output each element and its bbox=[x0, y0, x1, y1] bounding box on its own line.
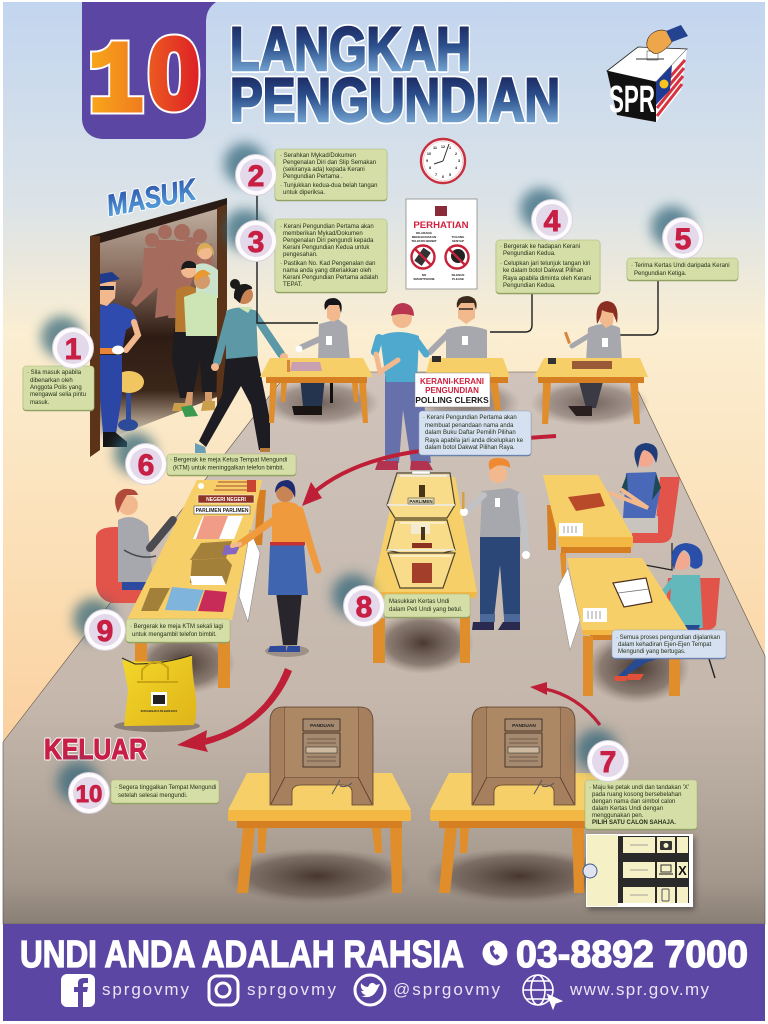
step badge 10 bbox=[57, 761, 110, 814]
poster: perhatian: PERHATIAN bbox=[413, 220, 469, 231]
callout: polling clerk note bbox=[419, 411, 531, 455]
callout: step 2: · Serahkan Mykad/Dokumen bbox=[280, 153, 356, 159]
callout: step 1 bbox=[23, 366, 94, 410]
title: Langkah Pengundian: LANGKAH bbox=[230, 15, 471, 83]
polling booth left: PANDUAN bbox=[310, 723, 334, 729]
queue of voters bbox=[172, 243, 218, 417]
callout: polling clerk note: Raya apabila jari anda dicelupkan ke bbox=[425, 438, 524, 444]
callout: step 6 bbox=[167, 454, 296, 475]
step badge 9 bbox=[73, 598, 126, 650]
callout: step 1: masuk. bbox=[30, 400, 50, 406]
callout: step 6: (KTM) untuk meninggalkan telefon bimbit. bbox=[173, 466, 284, 472]
wall clock: 12 bbox=[441, 145, 445, 149]
KTM table with papers: PARLIMEN PARLIMEN bbox=[196, 508, 249, 514]
callout: step 5: Pengundian Ketiga. bbox=[634, 271, 687, 277]
step badge 4 bbox=[520, 188, 572, 240]
phone number: 03-8892 7000 bbox=[516, 934, 748, 976]
step badge 3: 3 bbox=[248, 226, 264, 259]
website address: www.spr.gov.my bbox=[569, 980, 710, 999]
wall clock: 10 bbox=[427, 152, 431, 156]
callout: step 9: · Bergerak ke meja KTM sekali lagi bbox=[130, 624, 223, 630]
red arrow to step 6 bbox=[302, 436, 556, 506]
callout: step 2: untuk diperiksa. bbox=[283, 190, 325, 196]
step badge 1 bbox=[41, 316, 94, 368]
callout: polling clerk note: dalam botol Dakwat Pilihan Raya. bbox=[425, 445, 515, 451]
step badge 1: 1 bbox=[65, 333, 81, 366]
callout: step 10: setelah selesai mengundi. bbox=[118, 793, 188, 799]
voter with orange hair bbox=[460, 458, 530, 630]
callout: step 7: · Maju ke petak undi dan tandakan 'X' bbox=[589, 785, 689, 791]
step badge 8 bbox=[332, 574, 384, 626]
poster: perhatian: SILENCE bbox=[451, 273, 465, 277]
title panel with number 10: 1 bbox=[88, 28, 144, 141]
wall clock: 7 bbox=[435, 173, 437, 177]
sign: polling clerks: POLLING CLERKS bbox=[415, 395, 489, 405]
callout: step 5 bbox=[627, 258, 738, 280]
callout: step 4: Raya apabila diminta oleh Kerani bbox=[503, 276, 591, 282]
title panel with number 10 bbox=[82, 2, 216, 141]
clerk table 2 with clerk bbox=[425, 296, 510, 411]
centre table with ballot boxes: PARLIMEN bbox=[409, 499, 433, 504]
step badge 5 bbox=[651, 206, 704, 258]
callout: step 4: Pengundian Kedua. bbox=[503, 283, 556, 289]
silhouettes in doorway bbox=[131, 224, 212, 318]
callout: step 7: dalam Kertas Undi dengan bbox=[592, 806, 663, 812]
sign: polling clerks bbox=[415, 373, 490, 407]
step badge 5: 5 bbox=[675, 223, 691, 256]
title panel with number 10: 0 bbox=[148, 18, 200, 130]
sign: polling clerks: KERANI-KERANI bbox=[420, 377, 484, 386]
label: keluar: KELUAR bbox=[44, 734, 147, 766]
icon: website globe bbox=[523, 975, 561, 1008]
callout: polling clerk note: dalam Buku Daftar Pemilih Pilihan bbox=[425, 430, 516, 436]
callout: step 3: memberikan Mykad/Dokumen bbox=[283, 231, 363, 237]
wall clock: 5 bbox=[449, 173, 451, 177]
step badge 6: 6 bbox=[138, 449, 154, 482]
title: Langkah Pengundian: PENGUNDIAN bbox=[230, 66, 560, 134]
label: masuk: MASUK bbox=[104, 173, 201, 223]
right upper table with seated woman bbox=[543, 443, 680, 580]
woman in teal walking bbox=[195, 279, 288, 453]
callout: step 3: TEPAT. bbox=[283, 282, 303, 288]
sample ballot paper: X bbox=[678, 863, 687, 878]
callout: step 3: Kerani Pengundian Kedua untuk bbox=[283, 245, 370, 251]
step badge 7 bbox=[576, 729, 628, 782]
step badge 8: 8 bbox=[356, 591, 372, 624]
callout: step 6: · Bergerak ke meja Ketua Tempat Mengundi bbox=[170, 458, 287, 464]
icon: instagram bbox=[209, 976, 238, 1005]
polling booth right bbox=[430, 707, 613, 893]
door: masuk bbox=[90, 198, 227, 442]
title: Langkah Pengundian: LANGKAH bbox=[230, 15, 471, 83]
callout: step 4: · Bergerak ke hadapan Kerani bbox=[500, 244, 580, 250]
yellow bag: SURUHANJAYA PILIHAN RAYA bbox=[141, 710, 178, 713]
callout: step 1: · Sila masuk apabila bbox=[27, 370, 82, 376]
callout: step 3: · Kerani Pengundian Pertama akan bbox=[280, 224, 374, 230]
callout: step 5: · Terima Kertas Undi daripada Kerani bbox=[631, 263, 730, 269]
SPR ballot box logo bbox=[607, 25, 688, 122]
callout: step 4: · Celupkan jari telunjuk tangan kiri bbox=[500, 261, 590, 267]
polling booth left bbox=[228, 707, 411, 893]
step badge 4: 4 bbox=[544, 205, 561, 238]
callout: step 3: Kerani Pengundian Pertama adalah bbox=[283, 275, 378, 281]
woman at KTM table bbox=[232, 480, 318, 657]
step badge 7: 7 bbox=[600, 746, 616, 779]
step badge 10: 10 bbox=[76, 781, 102, 808]
poster: perhatian: TOLONG bbox=[452, 235, 465, 239]
callout: polling clerk note: membuat penandaan nama anda bbox=[425, 423, 514, 429]
callout: step 3: · Pastikan No. Kad Pengenalan dan bbox=[280, 261, 375, 267]
step badge 6 bbox=[114, 432, 166, 484]
title panel with number 10: 1 bbox=[88, 28, 144, 141]
poster: perhatian: SENYAP bbox=[452, 239, 464, 243]
wall clock: 9 bbox=[426, 159, 428, 163]
callout: step 8 bbox=[384, 594, 470, 617]
callout: step 1: dibenarkan oleh bbox=[30, 378, 73, 384]
KTM table with papers: NEGERI NEGERI bbox=[206, 497, 246, 503]
callout: step 8: dalam Peti Undi yang betul. bbox=[389, 607, 463, 613]
stool bbox=[114, 371, 144, 431]
transparent ballot boxes bbox=[387, 473, 455, 588]
connector lines bbox=[257, 195, 658, 335]
red arrow to keluar bbox=[177, 668, 292, 752]
callout: step 4: ke dalam botol Dakwat Pilihan bbox=[503, 268, 583, 274]
left door jamb bbox=[90, 236, 100, 457]
centre table with ballot boxes bbox=[372, 471, 477, 663]
poster: perhatian: MENGGUNAKAN bbox=[412, 235, 436, 239]
clerk table 3 with clerk bbox=[534, 301, 648, 424]
poster: perhatian: NO bbox=[422, 273, 427, 277]
poster: perhatian: DILARANG bbox=[416, 231, 433, 235]
step badge 9: 9 bbox=[97, 615, 113, 648]
callout: step 7 bbox=[585, 780, 697, 829]
wall clock: 2 bbox=[455, 152, 457, 156]
label: masuk: MASUK bbox=[104, 173, 201, 223]
callout: step 2: Pengenalan Diri dan Slip Semakan bbox=[283, 160, 376, 166]
sample ballot paper bbox=[583, 834, 695, 910]
twitter handle: @sprgovmy bbox=[393, 980, 500, 999]
sign: polling clerks: PENGUNDIAN bbox=[425, 386, 479, 395]
callout: step 4 bbox=[496, 240, 600, 293]
callout: step 2: (sekiranya ada) kepada Kerani bbox=[283, 167, 365, 173]
callout: step 7: pada ruang kosong bersebelahan bbox=[592, 792, 681, 798]
angled sign on KTM table bbox=[239, 530, 260, 622]
right lower table with seated woman bbox=[558, 543, 720, 696]
facebook handle: sprgovmy bbox=[102, 980, 190, 999]
wall clock: 6 bbox=[442, 175, 444, 179]
wall clock: 4 bbox=[455, 166, 458, 170]
callout: step 10 bbox=[111, 780, 219, 803]
wall clock: 8 bbox=[429, 166, 431, 170]
callout: step 2: Pengundian Pertama . bbox=[283, 174, 343, 180]
floor bbox=[3, 372, 765, 924]
callout: proses pengundian: · Semua proses pengundian dijalankan bbox=[616, 635, 720, 641]
poster: perhatian: SMARTPHONE bbox=[413, 277, 435, 281]
poster: perhatian: PLEASE bbox=[452, 277, 464, 281]
callout: step 10: · Segera tinggalkan Tempat Mengundi bbox=[115, 785, 216, 791]
title: Langkah Pengundian bbox=[230, 15, 560, 134]
callout: step 1: mengawal selia pintu bbox=[30, 392, 86, 398]
callout: step 7: menggunakan pen. bbox=[592, 813, 644, 819]
callout: step 3: nama anda yang diteriakkan oleh bbox=[283, 268, 371, 274]
icon: phone bbox=[482, 940, 508, 966]
step badge 3 bbox=[224, 209, 276, 262]
step badge 2: 2 bbox=[248, 160, 264, 193]
callout: step 1: Anggota Polis yang bbox=[30, 385, 82, 391]
poster: perhatian bbox=[406, 199, 477, 289]
footer slogan: UNDI ANDA ADALAH RAHSIA bbox=[20, 934, 464, 976]
SPR ballot box logo: SPR bbox=[609, 79, 655, 121]
callout: step 3: Pengenalan Diri pengundi kepada bbox=[283, 238, 374, 244]
callout: step 3: pengesahan. bbox=[283, 252, 318, 258]
callout: step 4: Pengundian Kedua. bbox=[503, 251, 556, 257]
icon: twitter bbox=[355, 975, 385, 1005]
wall clock: 3 bbox=[458, 159, 460, 163]
callout: step 9 bbox=[126, 619, 230, 642]
callout: proses pengundian: Mengundi yang bertugas. bbox=[618, 649, 686, 655]
step badge 2 bbox=[224, 143, 276, 196]
yellow bag bbox=[114, 655, 200, 732]
callout: proses pengundian: dalam kehadiran Ejen-Ejen Tempat bbox=[618, 642, 712, 648]
polling booth right: PANDUAN bbox=[512, 723, 536, 729]
callout: step 8: Masukkan Kertas Undi bbox=[389, 599, 449, 605]
callout: step 2: · Tunjukkan kedua-dua belah tangan bbox=[280, 183, 377, 189]
callout: proses pengundian bbox=[612, 630, 726, 658]
standing voter at clerk table bbox=[375, 303, 433, 470]
red arrow to step 7 bbox=[530, 682, 600, 725]
KTM table with papers bbox=[127, 480, 266, 688]
callout: step 3 bbox=[275, 219, 387, 292]
callout: polling clerk note: · Kerani Pengundian Pertama akan bbox=[423, 415, 517, 421]
callout: step 2 bbox=[275, 149, 387, 200]
callout: step 7: dengan nama dan simbol calon bbox=[592, 799, 675, 805]
callout: step 9: untuk mengambil telefon bimbit. bbox=[132, 632, 217, 638]
guard bbox=[100, 272, 138, 447]
title panel with number 10: 0 bbox=[148, 18, 200, 130]
poster: perhatian: TELEFON BIMBIT bbox=[411, 239, 437, 243]
clerk table 1 with clerk bbox=[260, 298, 373, 423]
icon: facebook bbox=[61, 974, 95, 1007]
title: Langkah Pengundian: PENGUNDIAN bbox=[230, 66, 560, 134]
wall clock: 1 bbox=[449, 146, 451, 150]
footer band bbox=[3, 924, 765, 1021]
callout: step 7: PILIH SATU CALON SAHAJA. bbox=[592, 820, 676, 826]
seated man at KTM table bbox=[96, 489, 173, 603]
label: keluar: KELUAR bbox=[44, 734, 147, 766]
instagram handle: sprgovmy bbox=[247, 980, 336, 999]
floor shadows under furniture bbox=[135, 380, 690, 904]
wall clock bbox=[421, 139, 465, 183]
wall clock: 11 bbox=[433, 146, 437, 150]
